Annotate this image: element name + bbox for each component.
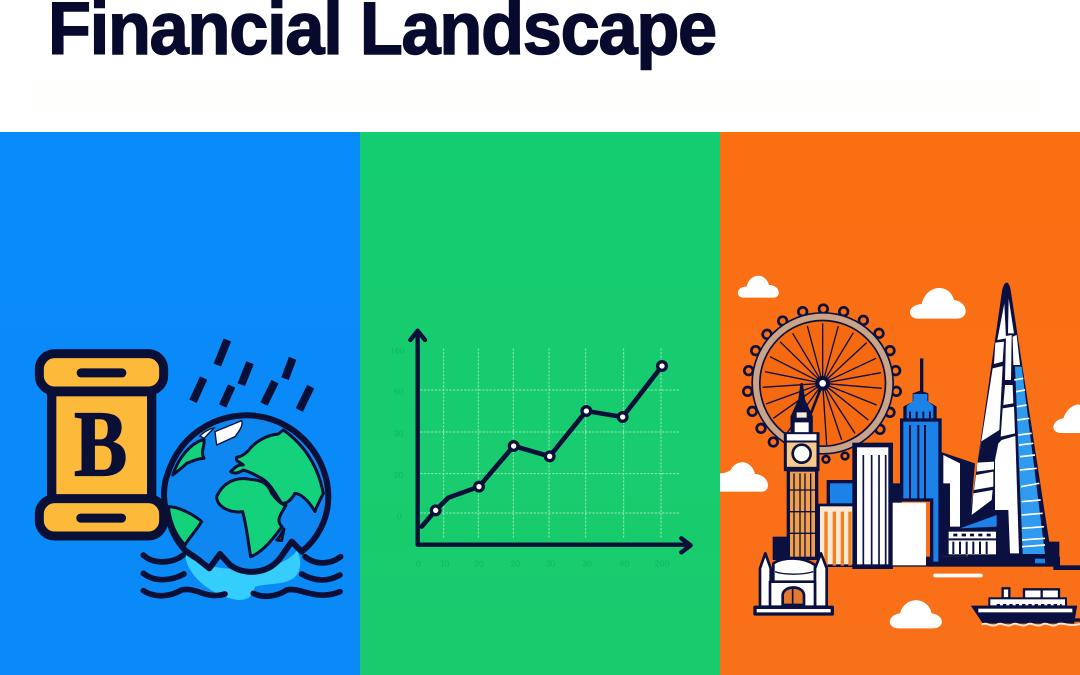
icon: bond scroll (39, 354, 164, 536)
axis labels: 30 (394, 429, 404, 439)
globe ocean (164, 415, 328, 572)
data line (422, 366, 662, 527)
waves (143, 555, 341, 596)
panel: orange London skyline (720, 132, 1080, 675)
panel: green chart (360, 132, 720, 675)
continents (168, 430, 323, 557)
axis labels: 160 (390, 345, 405, 355)
faded subtitle smudge (28, 80, 1038, 114)
icon: ferry (973, 588, 1080, 626)
panel: blue bond and climate (0, 132, 360, 675)
axes (410, 331, 691, 552)
axis labels: 10 (440, 559, 450, 569)
icon: clouds (720, 276, 1080, 628)
grid (420, 348, 680, 538)
globe outline (164, 415, 328, 572)
icon: Big Ben (785, 383, 818, 558)
icon: skyline buildings (773, 283, 1080, 577)
axis labels: 0 (397, 511, 402, 521)
axis labels: 0 (416, 559, 421, 569)
polar ice (200, 421, 242, 445)
icon: flooded globe (143, 415, 341, 600)
axis labels: 200 (655, 559, 669, 569)
icon: Shard tower (967, 283, 1050, 557)
axis labels: 40 (620, 559, 629, 569)
axis labels: 30 (582, 559, 592, 569)
axis labels: 20 (511, 559, 520, 569)
icon: London Eye (743, 305, 901, 463)
icon: rain (193, 340, 311, 410)
axis labels: 20 (394, 470, 404, 480)
icon: bond scroll: B (74, 393, 127, 497)
header background (0, 0, 1080, 132)
axis labels (390, 345, 669, 569)
icon: Westminster gate (755, 553, 832, 614)
water pool (185, 550, 300, 600)
axis labels: 60 (394, 387, 404, 397)
data points (431, 362, 666, 515)
axis labels: 30 (546, 559, 556, 569)
line chart (390, 331, 691, 569)
axis labels: 20 (474, 559, 484, 569)
